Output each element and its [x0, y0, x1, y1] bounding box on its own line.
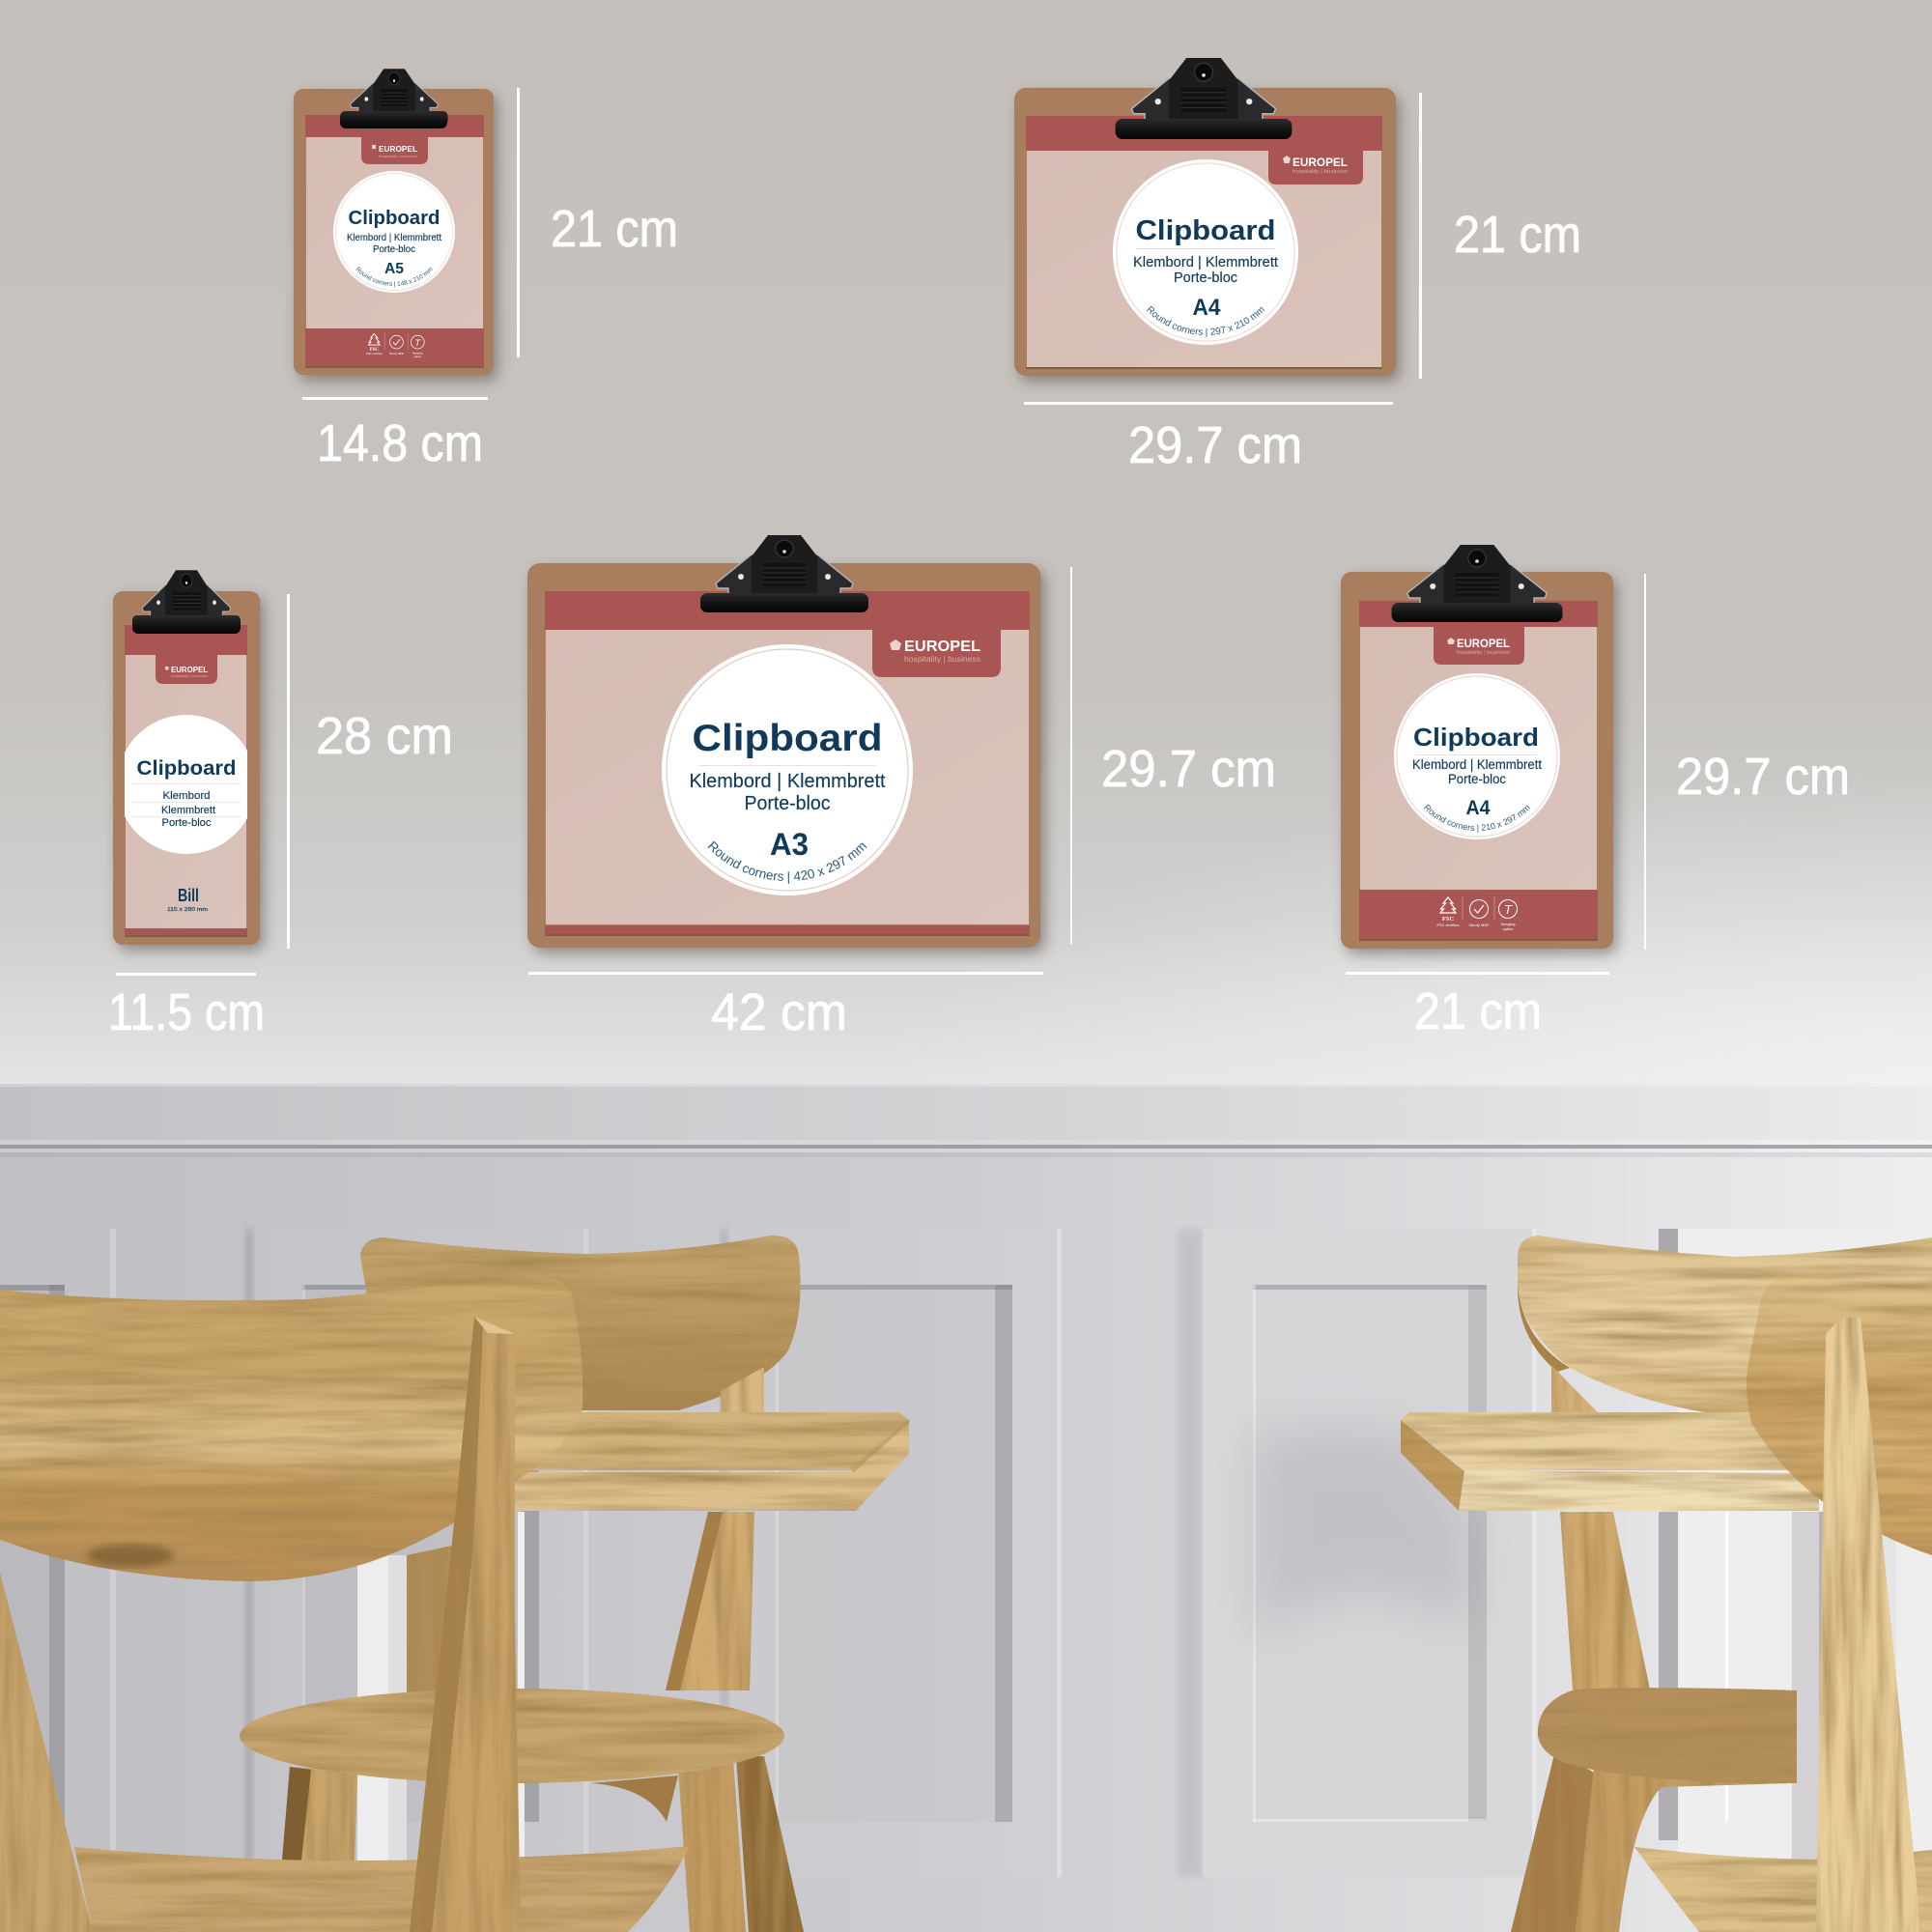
footer icons A4 portrait: T: [1504, 902, 1513, 917]
height label A5: 21 cm: [551, 200, 678, 258]
width label A3: 42 cm: [711, 983, 847, 1041]
round label A4 landscape: Porte-bloc: [1174, 270, 1237, 286]
round label A5: Clipboard: [348, 208, 440, 229]
EUROPEL tab: hospitality | business: [379, 154, 417, 158]
round label Bill: Klemmbrett: [161, 805, 215, 816]
round label A3: A3: [770, 827, 809, 862]
footer icons A5: FSC: [370, 348, 379, 353]
footer icons A4 portrait: [1436, 896, 1517, 931]
footer icons A5: FSC certified: [366, 352, 383, 355]
dimension lines A4 landscape: [1024, 93, 1422, 405]
EUROPEL tab: hospitality | business: [904, 655, 980, 664]
dimension lines A4 portrait: [1346, 574, 1646, 975]
EUROPEL tab: EUROPEL: [1457, 639, 1510, 650]
round label A4 landscape: Round corners | 297 x 210 mm: [1147, 305, 1265, 338]
clipboard A5: [292, 69, 504, 388]
round label A4 landscape: Clipboard: [1136, 215, 1275, 246]
left front wooden chair: [0, 1276, 690, 1932]
footer icons A5: option: [413, 355, 422, 358]
wainscot wall panelling: [0, 1084, 1932, 1932]
EUROPEL tab: [156, 655, 217, 684]
round label A4 portrait: Porte-bloc: [1448, 772, 1506, 786]
EUROPEL tab: [872, 630, 1001, 677]
round label A3: Clipboard: [692, 718, 883, 759]
upper wall background: [0, 0, 1932, 1087]
clipboard A4 portrait: [1338, 545, 1625, 962]
footer icons A4 portrait: Hanging: [1501, 922, 1515, 926]
footer icons A5: T: [414, 337, 421, 348]
white radiator pipes: [357, 1512, 1896, 1884]
round label A4 portrait: A4: [1466, 797, 1491, 819]
EUROPEL tab: [361, 137, 428, 164]
EUROPEL tab: hospitality | business: [1293, 169, 1348, 175]
round label A3: Round corners | 420 x 297 mm: [707, 840, 867, 884]
round label A5: Porte-bloc: [373, 244, 415, 255]
height label A4 landscape: 21 cm: [1454, 206, 1581, 264]
width label A4 landscape: 29.7 cm: [1128, 416, 1302, 474]
dimension lines A5: [302, 88, 520, 400]
round label A3: Klembord | Klemmbrett: [690, 771, 886, 792]
left table shelf: [483, 1412, 909, 1511]
width label Bill: 11.5 cm: [108, 983, 265, 1041]
round label A5: A5: [384, 261, 404, 277]
EUROPEL tab: EUROPEL: [171, 666, 208, 674]
round label A4 portrait: Klembord | Klemmbrett: [1412, 757, 1542, 772]
EUROPEL tab: [1434, 627, 1524, 665]
EUROPEL tab: EUROPEL: [904, 639, 980, 655]
metal clip A3: [700, 535, 868, 612]
dimension lines Bill: [116, 594, 290, 976]
round label A4 landscape: A4: [1192, 295, 1221, 321]
round label A5: Klembord | Klemmbrett: [347, 233, 441, 243]
footer icons A4 portrait: FSC certified: [1436, 923, 1460, 927]
height label A3: 29.7 cm: [1101, 740, 1276, 798]
footer icons A5: Sturdy MDF: [389, 352, 404, 355]
footer icons A5: [366, 333, 424, 358]
round label Bill: [125, 715, 247, 854]
round label Bill: Porte-bloc: [162, 817, 212, 829]
footer icons A4 portrait: FSC: [1442, 916, 1454, 923]
round label A5: Round corners | 148 x 210 mm: [355, 267, 433, 288]
Bill size text: 115 x 280 mm: [167, 907, 208, 913]
dimension lines A3: [528, 567, 1072, 975]
round label A4 landscape: Klembord | Klemmbrett: [1133, 254, 1279, 270]
metal clip A4 landscape: [1116, 58, 1292, 139]
round label A3: Porte-bloc: [744, 793, 831, 814]
footer icons A5: Hanging: [412, 352, 423, 355]
table shadow on the wall: [1253, 1430, 1473, 1642]
footer icons A4 portrait: Sturdy MDF: [1468, 923, 1490, 927]
round label A4 portrait: [1394, 673, 1560, 839]
round label A5: [333, 171, 455, 293]
metal clip Bill: [132, 570, 241, 634]
left rear wooden chair: [240, 1236, 804, 1932]
clipboard A4 landscape: [1012, 58, 1406, 389]
metal clip A5: [340, 69, 448, 128]
EUROPEL tab: EUROPEL: [1293, 156, 1348, 169]
width label A4 portrait: 21 cm: [1414, 982, 1542, 1040]
clipboard A3: [525, 535, 1053, 961]
metal clip A4 portrait: [1392, 545, 1562, 622]
EUROPEL tab: hospitality | business: [171, 674, 208, 678]
right front wooden chair: [1634, 1276, 1932, 1932]
EUROPEL tab: EUROPEL: [379, 144, 417, 154]
EUROPEL tab: hospitality | business: [1457, 650, 1511, 656]
clipboard Bill: [113, 570, 264, 951]
round label A3: [662, 644, 913, 895]
round label A4 landscape: [1113, 159, 1298, 345]
Bill size text: [167, 886, 208, 913]
height label Bill: 28 cm: [316, 707, 453, 765]
Bill size text: Bill: [178, 886, 199, 905]
width label A5: 14.8 cm: [317, 414, 483, 472]
round label A4 portrait: Clipboard: [1413, 723, 1539, 752]
footer icons A4 portrait: option: [1503, 926, 1513, 931]
height label A4 portrait: 29.7 cm: [1676, 748, 1850, 806]
right rear wooden chair: [1511, 1236, 1932, 1932]
round label Bill: Klembord: [162, 790, 211, 802]
round label A4 portrait: Round corners | 210 x 297 mm: [1424, 804, 1530, 833]
EUROPEL tab: [1268, 151, 1363, 185]
round label Bill: Clipboard: [137, 757, 236, 780]
right table shelf: [1401, 1412, 1819, 1511]
